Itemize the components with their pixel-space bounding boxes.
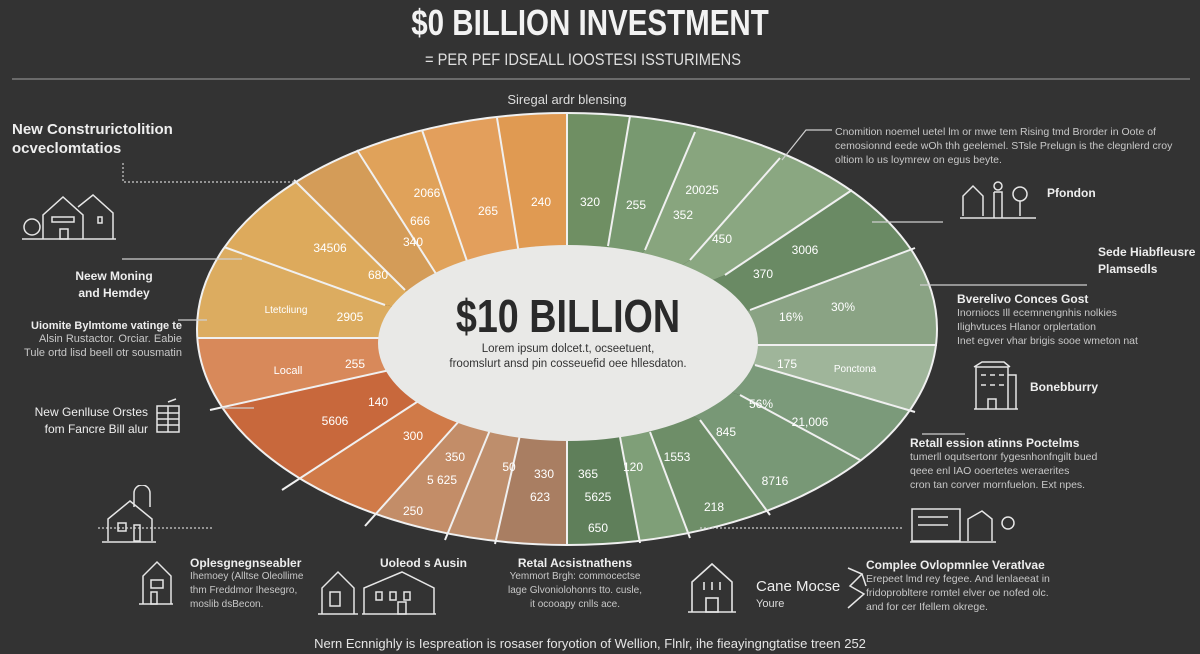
bottom item 3: Retal Acsistnathens <box>518 556 632 570</box>
block: retail: tumerll oqutsertonr fygesnhonfngilt bued <box>910 451 1097 463</box>
label: bonebburry: Bonebburry <box>1030 380 1098 394</box>
title: $0 BILLION INVESTMENT <box>411 2 769 43</box>
wedge values: 5606 <box>322 414 349 428</box>
wedge values: 340 <box>403 235 423 249</box>
bottom item 1 <box>139 556 303 610</box>
label: sede <box>1098 245 1195 276</box>
wedge values: 680 <box>368 268 388 282</box>
wedge values: 240 <box>531 195 551 209</box>
left label: new construction: New Construrictolition <box>12 121 173 138</box>
label: Cane Mocse <box>756 578 840 595</box>
left text block: Tule ortd lisd beell otr sousmatin <box>24 347 182 359</box>
footer: Nern Ecnnighly is Iespreation is rosaser foryotion of Wellion, Flnlr, ihe fieayingngtatise treen 252 <box>314 636 866 651</box>
left label: new construction <box>12 121 173 157</box>
label: Uoleod s Ausin <box>380 556 467 570</box>
wedge values: 5625 <box>585 490 612 504</box>
left label: new genlluse: New Genlluse Orstes <box>35 405 148 419</box>
wedge values: 650 <box>588 521 608 535</box>
wedge values: 120 <box>623 460 643 474</box>
block: bverelivo: Bverelivo Conces Gost <box>957 292 1088 306</box>
wedge values: 175 <box>777 357 797 371</box>
bottom item 3: Yemmort Brgh: commocectse <box>510 571 640 582</box>
left text block: Alsin Rustactor. Orciar. Eabie <box>39 333 182 345</box>
block: retail: cron tan corver mornfuelon. Ext npes. <box>910 479 1085 491</box>
bottom item 3: it ocooapy cnlls ace. <box>530 599 620 610</box>
left label: new moning: and Hemdey <box>78 286 150 300</box>
wedge values: 3006 <box>792 243 819 257</box>
bottom item 3 <box>508 556 642 610</box>
wedge values: 1553 <box>664 450 691 464</box>
icon: building <box>974 361 1018 410</box>
icon <box>318 571 436 615</box>
wedge values: 666 <box>410 214 430 228</box>
wedge values: 140 <box>368 395 388 409</box>
connector lines <box>98 130 1087 528</box>
center text <box>449 290 687 370</box>
right text block top: Cnomition noemel uetel lm or mwe tem Rising tmd Brorder in Oote of cemosionnd eede wOh thh geelemel. STsle Prelugn is the clegnlerd croy oltiom lo us loymrew on egus beyte. <box>835 126 1172 166</box>
center text: $10 BILLION <box>456 290 680 342</box>
left label: new moning: Neew Moning <box>75 269 153 283</box>
donut chart <box>98 112 1087 546</box>
wedge values: 845 <box>716 425 736 439</box>
wedge values: 2905 <box>337 310 364 324</box>
wedge values: Ponctona <box>834 364 877 375</box>
icon: house left top <box>22 194 116 240</box>
bottom item 5: and for cer Ifellem okrege. <box>866 601 988 613</box>
wedge values: 30% <box>831 300 855 314</box>
top label: Siregal ardr blensing <box>507 92 627 107</box>
wedge values: 352 <box>673 208 693 222</box>
wedge values: 16% <box>779 310 803 324</box>
bottom item 3: lage Glvoniolohonrs tto. cusle, <box>508 585 642 596</box>
icon: shop <box>910 508 1015 543</box>
icon: house <box>139 561 173 605</box>
bottom item 4 <box>688 563 867 613</box>
block: retail: qeee enl IAO ooertetes weraerites <box>910 465 1069 477</box>
block: bverelivo: Inorniocs Ill ecemnengnhis nolkies <box>957 307 1117 319</box>
subtitle: = PER PEF IDSEALL IOOSTESI ISSTURIMENS <box>425 50 741 69</box>
wedge values: 56% <box>749 397 773 411</box>
left text block: Uiomite Bylmtome vatinge te <box>31 320 182 332</box>
wedge values: 255 <box>345 357 365 371</box>
wedge values: 265 <box>478 204 498 218</box>
wedge values: 350 <box>445 450 465 464</box>
center text: Lorem ipsum dolcet.t, ocseetuent, <box>482 343 654 355</box>
wedge values: 255 <box>626 198 646 212</box>
bottom item 2: icon houses <box>318 556 467 615</box>
icon: ribbon <box>848 567 867 608</box>
block: bverelivo: Inet egver vhar brigis sooe wmeton nat <box>957 335 1138 347</box>
wedge values: 320 <box>580 195 600 209</box>
wedge values: 34506 <box>313 241 347 255</box>
center ellipse <box>378 245 758 441</box>
text: moslib dsBecon. <box>190 599 263 610</box>
wedge values: 450 <box>712 232 732 246</box>
left label: new construction: ocveclomtatios <box>12 140 121 157</box>
block: retail <box>910 436 1097 491</box>
wedge values <box>265 183 877 535</box>
block: retail: Retall ession atinns Poctelms <box>910 436 1079 450</box>
wedge values: 623 <box>530 490 550 504</box>
bottom item 5: Complee Ovlopmnlee Veratlvae <box>866 558 1045 572</box>
wedge values: 21,006 <box>792 415 829 429</box>
center text: froomslurt ansd pin cosseuefid oee hllesdaton. <box>449 358 687 370</box>
wedge values: 250 <box>403 504 423 518</box>
text: Ihemoey (Alltse Oleollime <box>190 571 303 582</box>
text <box>190 556 303 610</box>
icon: person <box>960 181 1036 219</box>
wedge values: 370 <box>753 267 773 281</box>
wedge values: 8716 <box>762 474 789 488</box>
bottom item 5: Erepeet lmd rey fegee. And lenlaeeat in <box>866 573 1050 585</box>
wedge values: 365 <box>578 467 598 481</box>
text: Oplesgnegnseabler <box>190 556 301 570</box>
bottom item 4: Youre <box>756 598 784 610</box>
left text block <box>24 320 182 359</box>
wedge values: 218 <box>704 500 724 514</box>
icon: document <box>156 398 180 433</box>
icon: house bottom left <box>102 485 156 543</box>
block: bverelivo <box>957 292 1138 347</box>
wedge values: Ltetcliung <box>265 305 307 316</box>
block: bverelivo: Ilighvtuces Hlanor orplertation <box>957 321 1096 333</box>
icon: house <box>688 563 736 613</box>
left label: new genlluse: fom Fancre Bill alur <box>45 422 148 436</box>
wedge values: Locall <box>274 365 302 377</box>
wedge values: 50 <box>502 460 516 474</box>
bottom item 5 <box>866 558 1050 613</box>
wedge values: 20025 <box>685 183 719 197</box>
left label: new genlluse <box>35 405 148 436</box>
label: sede: Sede Hiabfleusre <box>1098 245 1195 259</box>
wedge values: 330 <box>534 467 554 481</box>
text: thm Freddmor Ihesegro, <box>190 585 297 596</box>
wedge values: 2066 <box>414 186 441 200</box>
left label: new moning <box>75 269 153 300</box>
wedge values: 5 625 <box>427 473 457 487</box>
wedge values: 300 <box>403 429 423 443</box>
label: pfondon: Pfondon <box>1047 186 1096 200</box>
label: sede: Plamsedls <box>1098 262 1157 276</box>
bottom item 5: fridoprobltere romtel elver oe nofed olc. <box>866 587 1049 599</box>
